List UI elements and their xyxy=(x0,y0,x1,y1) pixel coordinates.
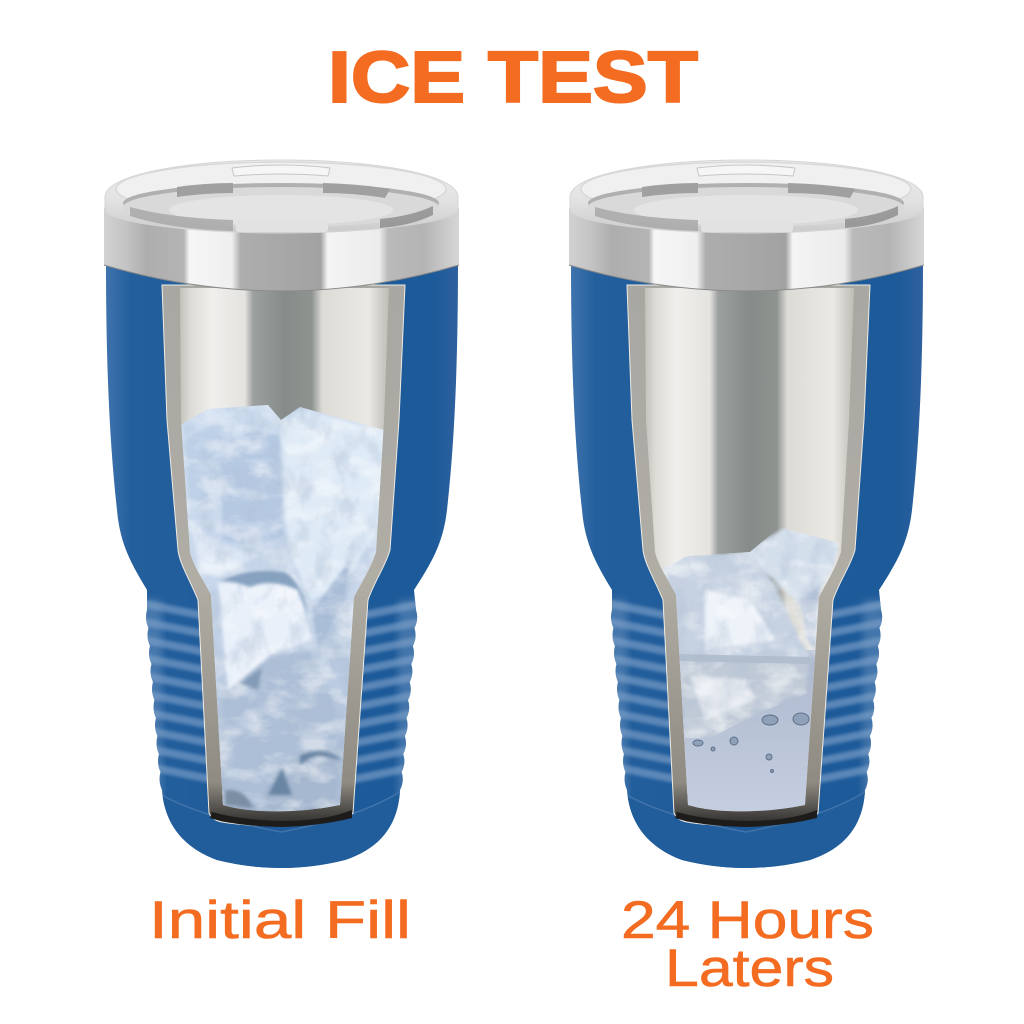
water line xyxy=(677,654,810,664)
meltwater xyxy=(680,650,816,812)
caption: 24 hours laters xyxy=(621,891,874,998)
left tumbler: initial fill xyxy=(104,160,459,880)
right tumbler: 24 hours later xyxy=(569,160,924,880)
title: ICE TEST xyxy=(328,38,698,118)
ice cubes xyxy=(663,528,840,738)
caption: 24 hours laters: 24 Hours xyxy=(621,891,874,950)
caption: initial fill: Initial Fill xyxy=(149,891,411,950)
tumbler shell with lid and steel band xyxy=(569,160,924,880)
ice filling the left tumbler xyxy=(181,405,384,812)
bubbles xyxy=(693,713,809,772)
caption: 24 hours laters: Laters xyxy=(665,939,834,998)
tumbler shell with lid and steel band xyxy=(104,160,459,880)
melted ice and meltwater in the right tumbler xyxy=(663,528,840,812)
